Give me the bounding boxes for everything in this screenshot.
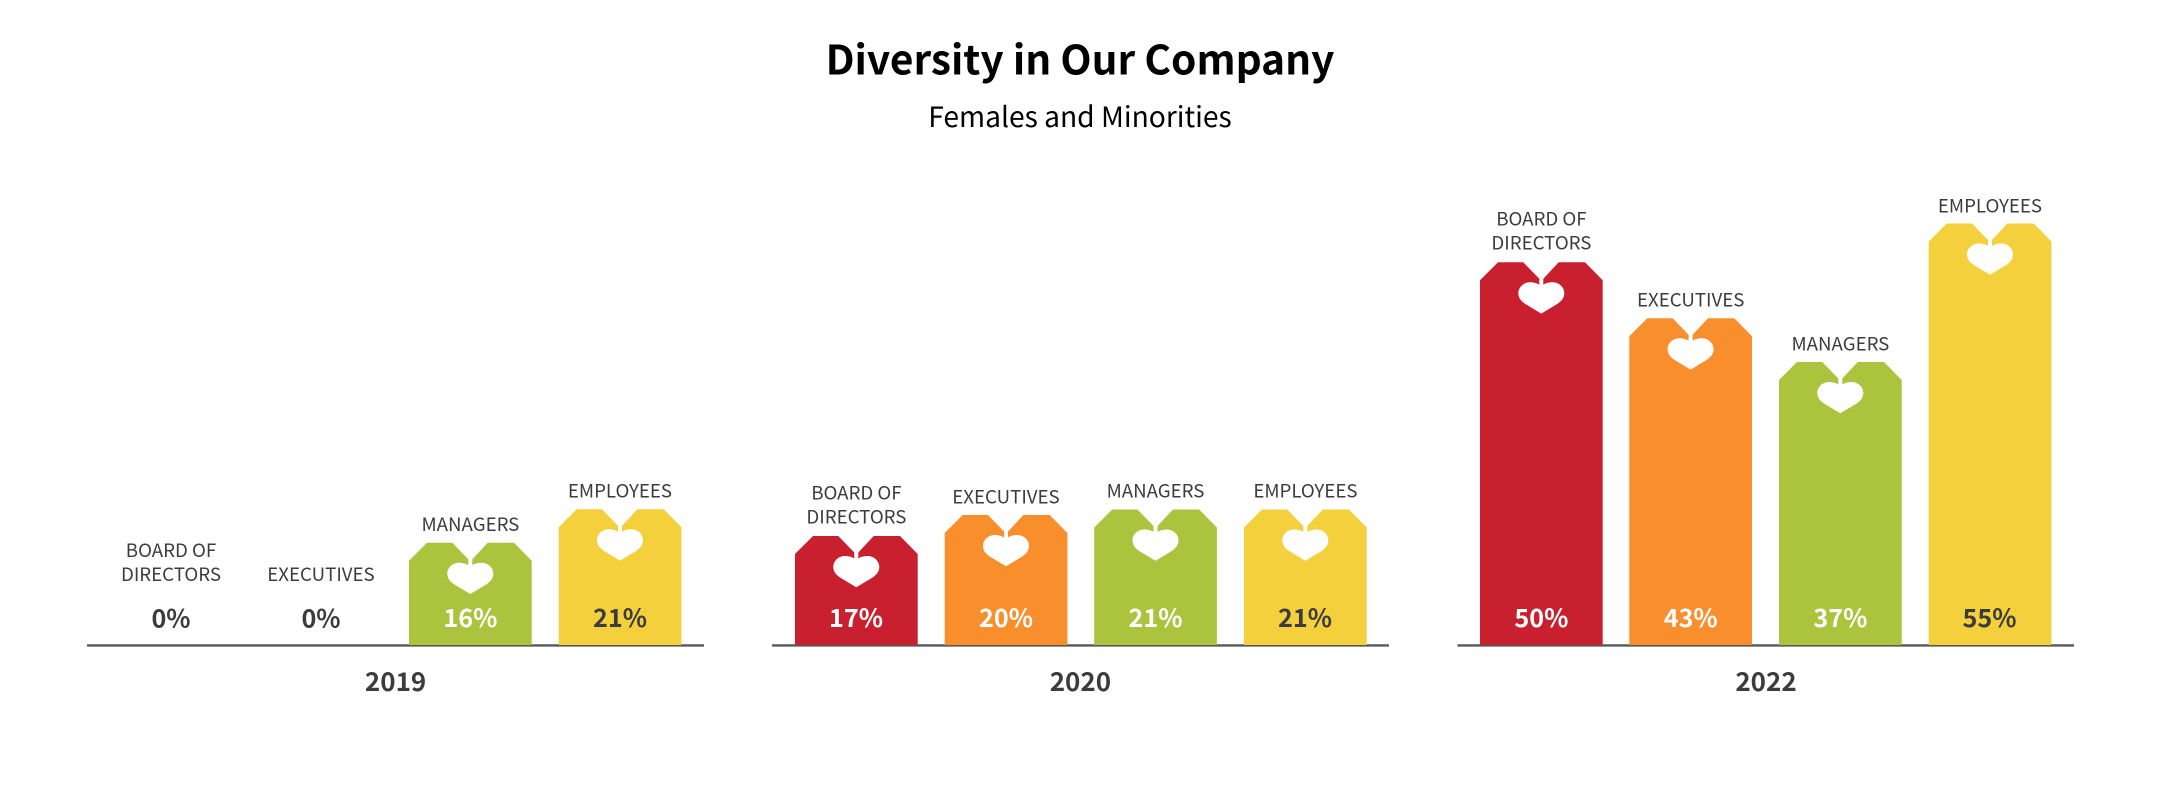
- panel: 2020: [772, 476, 1389, 699]
- label: 2022 board of directors: DIRECTORS: [1491, 228, 1591, 256]
- panel: 2019: [87, 476, 704, 699]
- value: 2022 executives 43%: 43%: [1664, 599, 1718, 635]
- value: 2022 managers 37%: 37%: [1813, 599, 1867, 635]
- axis 2020: [772, 644, 1389, 647]
- value: 2019 managers 16%: 16%: [443, 599, 497, 635]
- label: 2022 board of directors: BOARD OF: [1496, 204, 1587, 232]
- year 2020: 2020: [1050, 662, 1111, 699]
- year 2019: 2019: [365, 662, 426, 699]
- label: 2020 employees: EMPLOYEES: [1253, 476, 1357, 504]
- label: 2020 executives: EXECUTIVES: [952, 482, 1060, 510]
- bar: 2022 managers: [1779, 362, 1902, 645]
- bar: 2020 managers: [1094, 510, 1217, 645]
- title: Diversity in Our Company: [826, 28, 1334, 86]
- value: 2019 employees 21%: 21%: [593, 599, 647, 635]
- subtitle: Females and Minorities: [928, 95, 1232, 136]
- year 2022: 2022: [1735, 662, 1797, 699]
- bar: 2019 employees: [559, 509, 681, 645]
- bar: 2020 executives: [945, 515, 1067, 645]
- label: 2020 board of directors: BOARD OF: [811, 478, 902, 506]
- label: 2019 board of directors: BOARD OF: [126, 536, 216, 563]
- label: 2019 executives: EXECUTIVES: [267, 560, 375, 587]
- value: 2022 board 50%: 50%: [1514, 599, 1568, 635]
- axis 2019: [87, 644, 704, 647]
- label: 2019 board of directors: DIRECTORS: [121, 560, 221, 587]
- value: 2020 board 17%: 17%: [829, 599, 883, 635]
- label: 2020 board of directors: DIRECTORS: [806, 502, 906, 530]
- value: 2022 employees 55%: 55%: [1963, 599, 2016, 635]
- label: 2022 employees: EMPLOYEES: [1938, 192, 2042, 218]
- value: 2019 board 0%: 0%: [151, 600, 191, 636]
- label: 2019 employees: EMPLOYEES: [568, 476, 672, 504]
- bar: 2020 board: [795, 536, 918, 645]
- value: 2019 executives 0%: 0%: [301, 600, 341, 636]
- value: 2020 employees 21%: 21%: [1278, 599, 1332, 635]
- axis 2022: [1458, 644, 2074, 647]
- bar: 2022 executives: [1629, 318, 1752, 645]
- value: 2020 executives 20%: 20%: [979, 599, 1033, 635]
- bar: 2020 employees: [1244, 510, 1367, 645]
- value: 2020 managers 21%: 21%: [1129, 599, 1182, 635]
- bar: 2022 board: [1480, 262, 1603, 645]
- label: 2022 managers: MANAGERS: [1791, 330, 1889, 356]
- label: 2020 managers: MANAGERS: [1107, 476, 1204, 504]
- bar: 2022 employees: [1929, 224, 2051, 645]
- label: 2022 executives: EXECUTIVES: [1637, 286, 1744, 312]
- bar: 2019 managers: [409, 543, 532, 645]
- label: 2019 managers: MANAGERS: [421, 510, 519, 537]
- panel: 2022: [1458, 192, 2074, 699]
